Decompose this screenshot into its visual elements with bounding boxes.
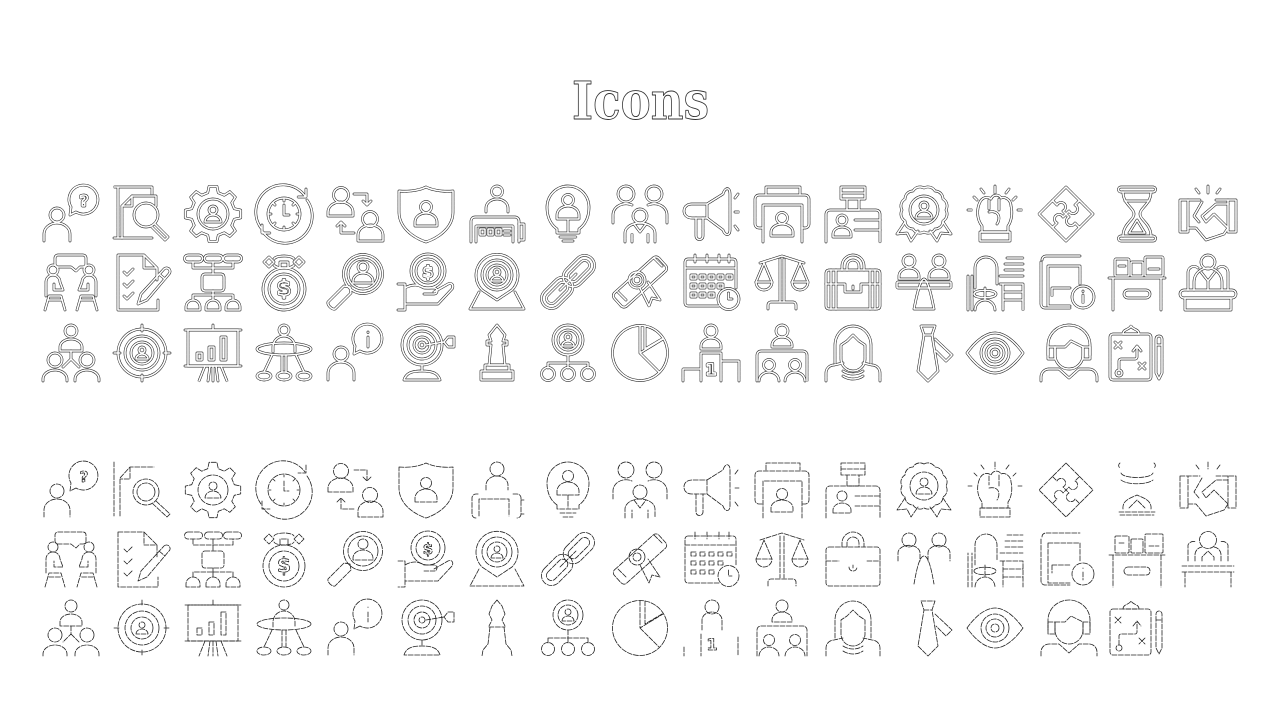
icon: person info [328, 599, 382, 655]
icon: clipboard plan [1110, 326, 1162, 380]
icon: three people panel [757, 600, 807, 656]
icon: presentation board [185, 325, 241, 381]
icon: award badge [897, 463, 951, 517]
icon: person with question bubble [44, 461, 98, 517]
icon: target dart [402, 325, 454, 380]
icon: desk with items [1109, 257, 1165, 310]
icon: hand with coin [398, 254, 453, 310]
icon: megaphone [684, 465, 739, 516]
icon: diploma scroll [612, 532, 668, 586]
icon: map pin person [470, 531, 524, 586]
icon: hourglass [1119, 463, 1155, 515]
icon: target person [114, 600, 170, 656]
icon: support agent [1041, 325, 1097, 381]
icon: presentation board [185, 600, 241, 656]
icon: person at desk [471, 186, 524, 242]
icon: book info [1041, 256, 1094, 308]
icon: target dart [402, 600, 454, 655]
icon: team of three [613, 186, 667, 242]
icon: podium [684, 600, 738, 656]
icon: office table [826, 187, 880, 242]
icon: eye [967, 333, 1023, 373]
icon: person network [542, 325, 594, 380]
icon: hand with coin [398, 531, 453, 587]
icon: calendar clock [685, 255, 739, 310]
icon: people on balance [898, 533, 950, 584]
icon: briefcase [826, 532, 880, 586]
icon: handshake [1180, 462, 1236, 516]
icon: megaphone [684, 189, 739, 240]
icon: chess piece [482, 600, 512, 656]
icon: podium [683, 325, 739, 381]
icon: shield person [399, 187, 453, 242]
icon: people on balance [897, 255, 951, 309]
icon: judge at bench [1182, 532, 1234, 587]
icon: light bulb person [547, 462, 589, 517]
icon: people exchange [328, 464, 383, 517]
icon: money bag [263, 256, 305, 310]
icon: support agent [1041, 600, 1097, 656]
icon: book info [1041, 533, 1094, 585]
icon: person at desk [472, 462, 524, 518]
icon: hierarchy people [43, 600, 99, 656]
icon: magnifier person [328, 254, 382, 309]
icon: necktie [918, 601, 952, 656]
icon: person network [542, 600, 594, 656]
icon: seated conversation [45, 532, 97, 587]
icon: three people panel [757, 325, 807, 381]
icon: clipboard plan [1110, 601, 1162, 655]
icon: documents magnifier [114, 462, 170, 517]
icon: clock cycle [256, 461, 312, 519]
icon: target person [114, 325, 170, 381]
icon: person info [328, 324, 382, 380]
icon: meeting table [257, 325, 311, 380]
icon: chain link [537, 528, 599, 590]
icon: calendar clock [685, 532, 739, 586]
icon: checklist pencil [118, 532, 170, 587]
icon: diploma scroll [612, 255, 668, 309]
icon: woman portrait [826, 601, 880, 656]
icon: desk with items [1109, 534, 1165, 587]
panel: outlined icon set [43, 185, 1236, 381]
icon: organisation chart [184, 255, 242, 310]
icon: clock cycle [256, 185, 312, 243]
icon: fist idea [968, 462, 1022, 517]
icon: pie chart [612, 600, 668, 656]
icon: necktie [918, 326, 952, 381]
icon: map pin person [470, 254, 524, 309]
icon: organisation chart [184, 532, 242, 587]
icon: hourglass [1118, 187, 1156, 241]
icon: puzzle diamond [1039, 187, 1093, 241]
icon: scales [756, 533, 808, 586]
icon: handshake [1180, 186, 1236, 240]
icon: checklist pencil [118, 255, 170, 310]
icon: documents magnifier [114, 187, 168, 240]
icon: printer profile [755, 187, 809, 242]
icon: team of three [613, 462, 667, 518]
icon: magnifier person [328, 532, 382, 586]
icon: judge at bench [1180, 255, 1236, 310]
icon: person with question bubble [44, 185, 98, 241]
icon: briefcase [826, 255, 880, 309]
icon: gear person [185, 186, 241, 242]
icon: gear person [185, 462, 241, 518]
icon: chess piece [481, 325, 513, 380]
icon: seated conversation [45, 255, 97, 310]
icon: pie chart [612, 326, 668, 380]
icon: people exchange [328, 188, 383, 241]
icon: puzzle diamond [1039, 463, 1093, 517]
panel: line icon set [43, 461, 1236, 656]
icon: woman portrait [826, 326, 880, 381]
icon: office table [826, 463, 880, 518]
icon: light bulb person [547, 186, 589, 241]
icon: meeting table [257, 600, 311, 655]
icon: scales [756, 256, 808, 309]
icon: chain link [537, 251, 599, 313]
icon: shield person [399, 463, 453, 518]
icon: desk and chair [968, 257, 1023, 310]
icon: money bag [263, 533, 305, 587]
icon: fist idea [968, 186, 1022, 241]
icon: eye [967, 608, 1023, 648]
icon: award badge [897, 187, 951, 241]
icon: desk and chair [968, 534, 1023, 587]
icon: hierarchy people [43, 325, 99, 381]
icon: printer profile [755, 463, 809, 518]
title: Icons [572, 71, 709, 132]
